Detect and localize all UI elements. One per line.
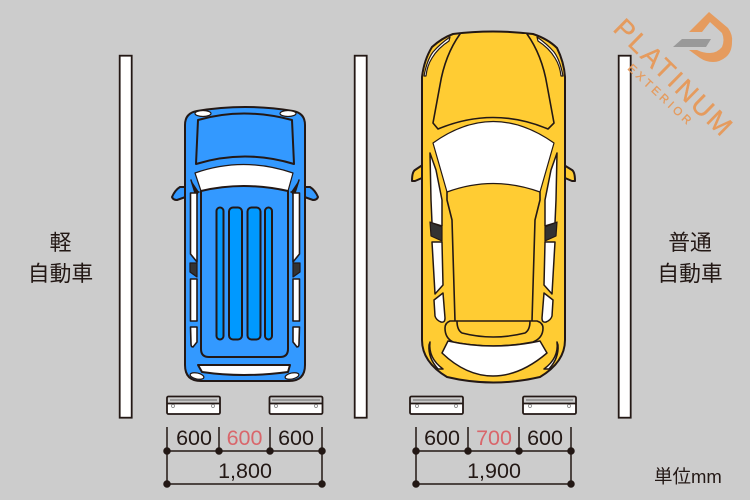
label: kei car: 自動車 xyxy=(28,261,93,286)
label: standard car xyxy=(657,230,723,286)
dimension values: kei car: 600 xyxy=(278,426,314,450)
label: kei car: 軽 xyxy=(50,230,72,255)
dimension values: standard car: 600 xyxy=(527,426,563,450)
logo name: PLATINUM xyxy=(608,13,738,142)
logo mark xyxy=(689,12,732,62)
label: standard car: 自動車 xyxy=(657,261,723,286)
logo subtitle: EXTERIOR xyxy=(625,62,693,127)
wheel stops xyxy=(167,396,576,414)
dimension lines: kei car xyxy=(164,427,325,487)
dimension values: kei car: 1,800 xyxy=(218,459,272,483)
blue kei car xyxy=(172,107,318,381)
unit note: 単位mm xyxy=(654,466,722,487)
watermark logo xyxy=(608,12,738,142)
dimension values: standard car xyxy=(424,426,563,483)
label: standard car: 普通 xyxy=(668,230,712,255)
dimension values: kei car xyxy=(176,426,314,483)
dimension values: standard car: 700 xyxy=(476,426,512,450)
label: kei car xyxy=(28,230,93,286)
parking lines xyxy=(120,56,631,418)
dimension values: kei car: 600 xyxy=(227,426,262,450)
logo bar xyxy=(673,39,711,47)
dimension values: kei car: 600 xyxy=(176,426,212,450)
dimension values: standard car: 600 xyxy=(424,426,460,450)
dimension lines: standard car xyxy=(413,427,574,487)
yellow standard car xyxy=(412,32,575,382)
dimension values: standard car: 1,900 xyxy=(467,459,521,483)
